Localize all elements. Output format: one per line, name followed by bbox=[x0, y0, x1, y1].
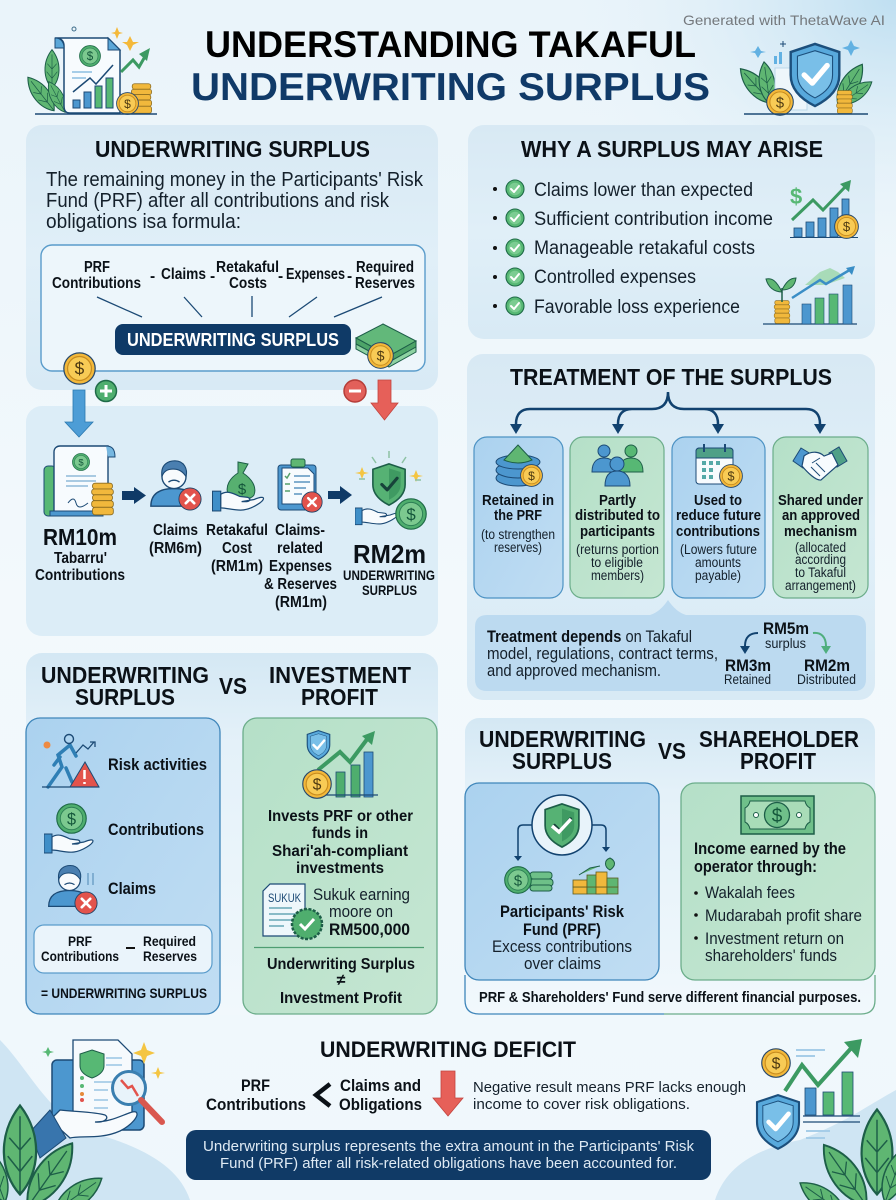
callout text: model, regulations, contract terms, bbox=[487, 645, 718, 663]
text bbox=[778, 492, 863, 593]
column: shareholder profit bbox=[681, 783, 875, 980]
text: (Lowers future bbox=[680, 542, 757, 557]
panel: underwriting surplus vs investment profit bbox=[26, 653, 438, 1015]
text: over claims bbox=[524, 955, 601, 973]
label: RM10m bbox=[35, 524, 125, 584]
label: RM10m: Contributions bbox=[35, 567, 125, 584]
icon: contribution bbox=[44, 804, 93, 853]
card: distributed bbox=[570, 437, 664, 598]
split diagram: RM5m: surplus bbox=[765, 635, 806, 651]
text: amounts bbox=[695, 555, 741, 570]
formula box: Reserves bbox=[355, 275, 415, 292]
text bbox=[676, 492, 761, 583]
callout bbox=[475, 600, 866, 691]
icon: document with coins bbox=[44, 446, 115, 516]
icon: shield with hand and coin bbox=[355, 451, 426, 529]
formula box: Retakaful bbox=[216, 259, 279, 276]
bullet list: Favorable loss experience bbox=[534, 297, 740, 318]
label: RM10m: Tabarru' bbox=[54, 550, 107, 567]
note: PRF & Shareholders' Fund serve different financial purposes. bbox=[479, 990, 861, 1006]
icon: banknotes with coin bbox=[356, 324, 416, 368]
label: Claims bbox=[108, 880, 156, 898]
description bbox=[268, 808, 413, 877]
column: PRF bbox=[465, 783, 659, 980]
comparison: Obligations bbox=[339, 1095, 422, 1114]
note: Investment Profit bbox=[280, 990, 403, 1007]
icon: banknote bbox=[741, 796, 814, 834]
label: expenses and reserves: Expenses bbox=[269, 558, 332, 575]
icon: participants bbox=[592, 445, 643, 486]
column: underwriting surplus bbox=[26, 718, 220, 1014]
formula box: - bbox=[210, 268, 215, 285]
bullet list: Manageable retakaful costs bbox=[534, 238, 755, 259]
text: payable) bbox=[695, 568, 741, 583]
description: Shari'ah-compliant bbox=[272, 843, 409, 860]
panel: treatment of the surplus bbox=[467, 354, 875, 700]
heading: UNDERWRITING DEFICIT bbox=[320, 1037, 577, 1062]
text: Used to bbox=[694, 492, 742, 509]
title: UNDERSTANDING TAKAFUL bbox=[205, 23, 696, 65]
label: Risk activities bbox=[108, 756, 207, 774]
bullet list: Investment return on bbox=[705, 929, 844, 948]
arrow: down bbox=[433, 1071, 463, 1116]
icon: claimant bbox=[49, 866, 97, 914]
text: operator through: bbox=[694, 857, 817, 876]
summary banner bbox=[186, 1130, 711, 1180]
definition text bbox=[46, 169, 424, 233]
formula box bbox=[34, 925, 212, 973]
icon: fund split bbox=[505, 795, 618, 894]
text: contributions bbox=[676, 523, 760, 540]
bullet list: Wakalah fees bbox=[705, 883, 795, 902]
formula box: Reserves bbox=[143, 949, 197, 964]
formula box: Contributions bbox=[41, 949, 119, 964]
definition text: obligations isa formula: bbox=[46, 211, 241, 233]
card: retained bbox=[474, 437, 563, 598]
text: an approved bbox=[782, 507, 860, 524]
icon: sukuk certificate: SUKUK bbox=[268, 893, 301, 905]
text: arrangement) bbox=[785, 578, 856, 593]
heading: PROFIT bbox=[740, 748, 816, 774]
comparison: Claims and bbox=[340, 1076, 421, 1095]
text: to Takaful bbox=[795, 565, 846, 580]
icon: plant and growth chart bbox=[763, 266, 857, 324]
label: expenses and reserves: related bbox=[277, 540, 323, 557]
note bbox=[267, 956, 415, 1007]
icon: money bag on hand bbox=[212, 462, 264, 511]
bullet list: shareholders' funds bbox=[705, 946, 837, 965]
formula box: Expenses bbox=[286, 266, 345, 283]
description: investments bbox=[296, 860, 384, 877]
card: reduce contributions bbox=[672, 437, 765, 598]
label: Contributions bbox=[108, 821, 204, 839]
text: members) bbox=[591, 568, 644, 583]
split diagram: RM5m: RM3m bbox=[725, 656, 771, 675]
text bbox=[575, 492, 660, 583]
formula box: - bbox=[347, 268, 352, 285]
text: reduce future bbox=[676, 507, 761, 524]
label: RM2m bbox=[343, 539, 435, 598]
bullet list: Claims lower than expected bbox=[534, 180, 753, 201]
panel: underwriting surplus vs shareholder profit bbox=[465, 718, 875, 1014]
heading: SURPLUS bbox=[512, 748, 612, 774]
label: retakaful cost bbox=[206, 522, 268, 575]
icon: shield with plant and coins bbox=[734, 40, 876, 115]
arrow bbox=[328, 486, 352, 504]
icon: risk activity bbox=[42, 734, 99, 787]
text bbox=[492, 903, 632, 973]
callout text: Treatment depends on Takaful bbox=[487, 628, 692, 646]
icon: document, growth chart and coins bbox=[22, 27, 157, 116]
branching arrows bbox=[510, 392, 826, 434]
text: distributed to bbox=[575, 507, 660, 524]
text: participants bbox=[580, 523, 655, 540]
icon: chart and coin bbox=[790, 180, 858, 238]
icon: bottom left leaves bbox=[0, 1106, 108, 1200]
formula box: PRF bbox=[68, 934, 92, 949]
formula box: - bbox=[150, 268, 155, 285]
formula box: Claims bbox=[161, 266, 206, 283]
split diagram: RM5m: RM2m bbox=[804, 656, 850, 675]
heading: SHAREHOLDER bbox=[699, 726, 859, 752]
formula box: - bbox=[278, 268, 283, 285]
split diagram: RM5m: Retained bbox=[724, 671, 771, 687]
arrow bbox=[122, 487, 146, 504]
comparison bbox=[206, 1076, 422, 1114]
icon: document review with magnifier bbox=[30, 1040, 165, 1158]
label: expenses and reserves: Claims- bbox=[275, 522, 325, 539]
label: retakaful cost: Retakaful bbox=[206, 522, 268, 539]
sukuk text: RM500,000 bbox=[329, 920, 410, 939]
heading: SURPLUS bbox=[75, 684, 175, 710]
label: claims: Claims bbox=[153, 522, 198, 539]
text: Fund (PRF) bbox=[523, 921, 601, 939]
icon: handshake bbox=[793, 447, 847, 480]
formula box: Required bbox=[356, 259, 414, 276]
note: ≠ bbox=[337, 972, 346, 989]
summary banner: Underwriting surplus represents the extra amount in the Participants' Risk bbox=[203, 1139, 695, 1155]
bullet list bbox=[493, 180, 773, 318]
section: underwriting deficit bbox=[186, 1037, 746, 1180]
icon: calendar with coin bbox=[696, 444, 742, 487]
icon: money bag on hand: $ bbox=[238, 481, 247, 498]
split diagram: RM5m: RM5m bbox=[763, 619, 809, 638]
icon: subtraction arrow bbox=[344, 380, 398, 420]
formula box bbox=[41, 245, 425, 371]
icon: banknote: $ bbox=[772, 806, 783, 827]
panel: why a surplus may arise bbox=[468, 125, 875, 339]
formula box: PRF bbox=[84, 259, 110, 276]
heading: TREATMENT OF THE SURPLUS bbox=[510, 364, 832, 390]
label: retakaful cost: Cost bbox=[222, 540, 252, 557]
label: expenses and reserves: & Reserves bbox=[264, 576, 337, 593]
comparison: PRF bbox=[241, 1076, 270, 1095]
icon: shield and growth chart bbox=[757, 1039, 862, 1149]
text: mechanism bbox=[784, 523, 857, 540]
icon: claimant bbox=[151, 461, 201, 510]
split diagram: RM5m: Distributed bbox=[797, 671, 856, 687]
label: claims bbox=[149, 522, 202, 557]
text: Shared under bbox=[778, 492, 863, 509]
description: funds in bbox=[312, 825, 368, 842]
callout text bbox=[487, 628, 718, 680]
text: Excess contributions bbox=[492, 938, 632, 956]
definition text: Fund (PRF) after all contributions and risk bbox=[46, 190, 390, 212]
label: RM2m: RM2m bbox=[353, 539, 426, 569]
heading: INVESTMENT bbox=[269, 662, 411, 688]
icon: reserves bbox=[496, 445, 542, 486]
text: Retained in bbox=[482, 492, 554, 509]
label: expenses and reserves bbox=[264, 522, 337, 611]
formula box: Required bbox=[143, 934, 196, 949]
label: RM10m: RM10m bbox=[43, 524, 117, 550]
heading: WHY A SURPLUS MAY ARISE bbox=[521, 136, 823, 162]
icon: investment growth bbox=[303, 731, 378, 798]
explanation: Negative result means PRF lacks enough bbox=[473, 1079, 746, 1096]
label: RM2m: SURPLUS bbox=[362, 582, 417, 598]
definition text: The remaining money in the Participants' Risk bbox=[46, 169, 424, 191]
heading: UNDERWRITING SURPLUS bbox=[95, 136, 370, 162]
result text: = UNDERWRITING SURPLUS bbox=[41, 985, 207, 1001]
text: Income earned by the bbox=[694, 839, 846, 858]
description: Invests PRF or other bbox=[268, 808, 413, 825]
summary banner: Fund (PRF) after all risk-related obligations have been accounted for. bbox=[220, 1156, 677, 1172]
text: reserves) bbox=[494, 540, 542, 555]
label: RM2m: UNDERWRITING bbox=[343, 567, 435, 583]
text: (returns portion bbox=[576, 542, 659, 557]
text: Participants' Risk bbox=[500, 903, 625, 921]
column: investment profit bbox=[243, 718, 437, 1014]
label: retakaful cost: (RM1m) bbox=[211, 558, 263, 575]
text bbox=[481, 492, 555, 555]
bullet list: Mudarabah profit share bbox=[705, 906, 862, 925]
text: Partly bbox=[599, 492, 637, 509]
icon: sukuk certificate bbox=[263, 884, 322, 939]
heading: PROFIT bbox=[301, 684, 378, 710]
icon: bottom right leaves bbox=[794, 1109, 896, 1200]
icon: coin with addition arrow bbox=[64, 353, 116, 437]
bullet list: Controlled expenses bbox=[534, 267, 696, 288]
heading: VS bbox=[219, 673, 247, 699]
result pill: UNDERWRITING SURPLUS bbox=[127, 330, 339, 350]
text: (to strengthen bbox=[481, 527, 555, 542]
callout text: and approved mechanism. bbox=[487, 662, 661, 680]
note: Underwriting Surplus bbox=[267, 956, 415, 973]
result pill bbox=[115, 324, 351, 355]
text: (allocated bbox=[795, 540, 846, 555]
icon: chart and coin: $ bbox=[790, 184, 802, 209]
text bbox=[694, 839, 846, 876]
title: UNDERWRITING SURPLUS bbox=[191, 66, 710, 109]
heading: UNDERWRITING bbox=[479, 726, 646, 752]
comparison: Contributions bbox=[206, 1095, 306, 1114]
panel: worked example flow bbox=[26, 406, 438, 636]
bullet list bbox=[694, 883, 862, 965]
sukuk text: moore on bbox=[329, 902, 393, 921]
title bbox=[191, 23, 710, 109]
explanation: income to cover risk obligations. bbox=[473, 1096, 690, 1113]
text: the PRF bbox=[494, 507, 542, 524]
watermark: Generated with ThetaWave AI bbox=[683, 12, 885, 28]
label: expenses and reserves: (RM1m) bbox=[275, 594, 327, 611]
split diagram: RM5m bbox=[724, 619, 856, 687]
label: claims: (RM6m) bbox=[149, 540, 202, 557]
heading bbox=[41, 662, 411, 710]
bullet list: Sufficient contribution income bbox=[534, 209, 773, 230]
heading: UNDERWRITING bbox=[41, 662, 209, 688]
formula box: Costs bbox=[229, 275, 267, 292]
text: to eligible bbox=[591, 555, 643, 570]
sukuk text: Sukuk earning bbox=[313, 885, 410, 904]
formula box: Contributions bbox=[52, 275, 141, 292]
card: shared mechanism bbox=[773, 437, 868, 598]
heading: VS bbox=[658, 738, 686, 764]
explanation bbox=[473, 1079, 746, 1113]
icon: clipboard bbox=[278, 459, 322, 512]
text: according bbox=[795, 552, 846, 567]
sukuk text bbox=[313, 885, 410, 939]
heading bbox=[479, 726, 859, 774]
